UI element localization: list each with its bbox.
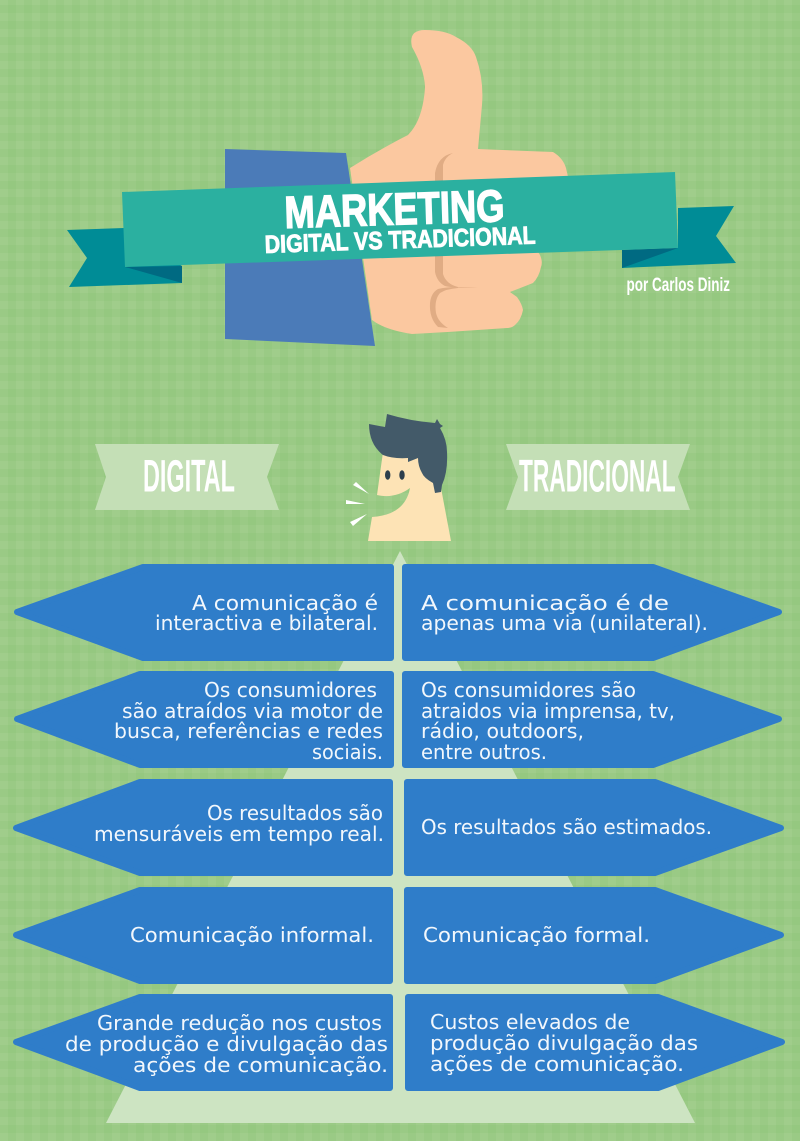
row 2: tradicional: entre outros. <box>421 740 547 764</box>
row 5: tradicional: produção divulgação das <box>430 1031 698 1055</box>
banner: tradicional <box>506 444 690 510</box>
face and neck <box>368 450 451 541</box>
row 5: digital: ações de comunicação. <box>133 1053 388 1077</box>
row 1: tradicional <box>405 567 779 658</box>
title <box>264 180 536 259</box>
finger shade: lower <box>430 287 458 328</box>
row 3: digital <box>16 782 390 873</box>
row 1: digital: interactiva e bilateral. <box>155 611 378 635</box>
ribbon left fold <box>125 266 182 283</box>
ribbon right tail <box>622 206 736 268</box>
row 4: tradicional <box>407 890 781 981</box>
author credit: por Carlos Diniz <box>626 275 730 296</box>
row 1: tradicional: apenas uma via (unilateral). <box>421 611 708 635</box>
finger shade: upper <box>435 153 453 182</box>
title: MARKETING <box>284 180 505 238</box>
row 5: digital: Grande redução nos custos <box>97 1011 382 1035</box>
banner: digital: DIGITAL <box>143 451 235 502</box>
icon: thumbs up hand <box>350 30 568 334</box>
background pyramid <box>106 551 695 1123</box>
eyes <box>385 470 405 480</box>
row 1: digital <box>17 567 391 658</box>
row 5: tradicional: Custos elevados de <box>430 1010 630 1034</box>
row 2: tradicional <box>405 674 779 765</box>
row 5: tradicional: ações de comunicação. <box>430 1052 684 1076</box>
speech sparks <box>346 482 369 526</box>
shirt sleeve <box>225 149 375 346</box>
subtitle: DIGITAL VS TRADICIONAL <box>264 222 536 259</box>
row 3: digital: mensuráveis em tempo real. <box>94 822 384 846</box>
row 2: digital <box>17 674 391 765</box>
row 5: digital: de produção e divulgação das <box>65 1032 388 1056</box>
row 3: digital: Os resultados são <box>207 801 383 825</box>
row 2: digital: Os consumidores <box>204 678 377 702</box>
row 3: tradicional: Os resultados são estimados. <box>421 815 712 839</box>
row 4: tradicional: Comunicação formal. <box>423 923 650 947</box>
row 4: digital: Comunicação informal. <box>130 923 374 947</box>
row 3: tradicional <box>407 782 781 873</box>
row 2: tradicional: Os consumidores são <box>421 678 636 702</box>
ribbon main band <box>122 172 678 267</box>
row 5: digital <box>16 997 390 1088</box>
row 2: digital: sociais. <box>312 740 383 764</box>
row 2: tradicional: atraidos via imprensa, tv, <box>421 699 675 723</box>
header: thumbs up and ribbon <box>67 30 736 346</box>
banner: digital <box>95 444 279 510</box>
row 4: digital <box>16 890 390 981</box>
ribbon right fold <box>622 248 678 268</box>
row 2: tradicional: rádio, outdoors, <box>421 719 584 743</box>
ribbon left tail <box>67 228 182 287</box>
hair <box>369 414 447 493</box>
row 2: digital: são atraídos via motor de <box>122 699 383 723</box>
finger shade: middle <box>435 255 478 288</box>
row 5: tradicional <box>408 997 782 1088</box>
row 1: digital: A comunicação é <box>192 591 378 615</box>
icon: speaking man <box>346 414 451 541</box>
row 1: tradicional: A comunicação é de <box>421 591 669 615</box>
row 2: digital: busca, referências e redes <box>114 719 383 743</box>
